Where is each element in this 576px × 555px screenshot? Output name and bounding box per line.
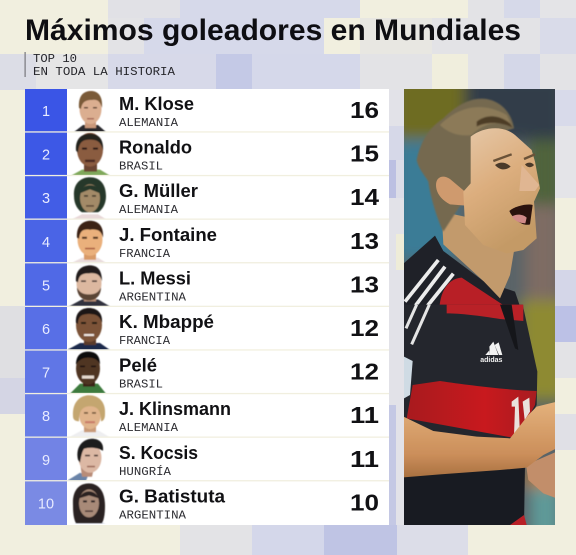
row 2: Ronaldo bbox=[25, 133, 389, 176]
nose bbox=[519, 165, 539, 191]
row 9: S. Kocsis bbox=[25, 438, 389, 481]
row 3: G. Müller: 3 bbox=[42, 191, 50, 207]
neck bbox=[442, 214, 514, 298]
row 2: Ronaldo: BRASIL bbox=[119, 160, 163, 174]
row 8: J. Klinsmann: 11 bbox=[350, 402, 379, 428]
row 1: M. Klose: 1 bbox=[42, 104, 50, 120]
row 6: K. Mbappé: FRANCIA bbox=[119, 334, 171, 348]
row 3: G. Müller: G. Müller bbox=[119, 180, 198, 201]
row 7: Pelé: BRASIL bbox=[119, 378, 163, 392]
row 9: S. Kocsis: 11 bbox=[350, 446, 379, 472]
portrait: Kocsis bbox=[67, 439, 103, 481]
row 5: L. Messi: L. Messi bbox=[119, 267, 191, 288]
row 7: Pelé: 12 bbox=[350, 359, 379, 385]
jersey collar and shoulder bbox=[400, 236, 521, 308]
red stomach band bbox=[407, 381, 537, 438]
portrait: Ronaldo bbox=[71, 133, 110, 176]
subtitle bbox=[24, 52, 176, 79]
subtitle: TOP 10 bbox=[33, 52, 77, 66]
row 1: M. Klose bbox=[25, 89, 389, 132]
red shoulder panel bbox=[440, 278, 502, 305]
row 5: L. Messi bbox=[25, 263, 389, 306]
row 9: S. Kocsis: HUNGRÍA bbox=[119, 464, 172, 479]
row 7: Pelé: Pelé bbox=[119, 355, 157, 376]
row 4: J. Fontaine: J. Fontaine bbox=[119, 224, 217, 245]
portrait: Pelé bbox=[70, 352, 106, 394]
row 5: L. Messi: ARGENTINA bbox=[119, 290, 187, 304]
adidas logo bbox=[480, 342, 503, 364]
row 10: G. Batistuta: ARGENTINA bbox=[119, 508, 187, 522]
row 6: K. Mbappé bbox=[25, 307, 389, 350]
shoulder stripes bbox=[405, 260, 453, 308]
open mouth bbox=[509, 204, 533, 225]
portrait: Mbappé bbox=[67, 308, 110, 350]
face bbox=[463, 128, 540, 253]
placket bbox=[500, 305, 518, 350]
shirt number 11 bbox=[512, 397, 530, 436]
row 6: K. Mbappé: K. Mbappé bbox=[119, 311, 214, 332]
title: Máximos goleadores en Mundiales bbox=[25, 14, 521, 47]
row 2: Ronaldo: 2 bbox=[42, 148, 50, 164]
ranking table bbox=[25, 89, 389, 525]
row 10: G. Batistuta: 10 bbox=[38, 496, 54, 512]
row 7: Pelé: 7 bbox=[42, 366, 50, 382]
row 7: Pelé bbox=[25, 351, 389, 394]
ear bbox=[436, 177, 466, 206]
row 2: Ronaldo: Ronaldo bbox=[119, 137, 192, 158]
photo background blur bbox=[404, 89, 555, 525]
row 10: G. Batistuta: 10 bbox=[350, 489, 379, 515]
row 10: G. Batistuta bbox=[25, 481, 389, 525]
portrait: Fontaine bbox=[72, 221, 106, 263]
lower shirt bbox=[404, 465, 525, 525]
row 8: J. Klinsmann: ALEMANIA bbox=[119, 421, 179, 435]
row 4: J. Fontaine: FRANCIA bbox=[119, 247, 171, 261]
row 6: K. Mbappé: 12 bbox=[350, 315, 379, 341]
row 9: S. Kocsis: 9 bbox=[42, 453, 50, 469]
portrait: Messi bbox=[69, 265, 110, 306]
row 5: L. Messi: 13 bbox=[350, 271, 379, 297]
row 3: G. Müller: ALEMANIA bbox=[119, 203, 179, 217]
portrait: Klose bbox=[74, 91, 106, 132]
row 1: M. Klose: M. Klose bbox=[119, 93, 194, 114]
row 4: J. Fontaine bbox=[25, 220, 389, 263]
row 2: Ronaldo: 15 bbox=[350, 141, 379, 167]
portrait: Klinsmann bbox=[69, 395, 110, 437]
adidas logo: adidas bbox=[480, 357, 503, 364]
row 3: G. Müller bbox=[25, 176, 389, 219]
row 4: J. Fontaine: 13 bbox=[350, 228, 379, 254]
sleeve stripes bbox=[406, 305, 429, 344]
hair bbox=[417, 99, 514, 232]
dark chest bbox=[400, 305, 537, 445]
row 4: J. Fontaine: 4 bbox=[42, 235, 50, 251]
row 8: J. Klinsmann bbox=[25, 394, 389, 437]
sleeve badge bbox=[404, 357, 413, 398]
lower hand bbox=[526, 452, 557, 498]
subtitle: EN TODA LA HISTORIA bbox=[33, 65, 176, 79]
forearm and hand bbox=[400, 402, 557, 478]
row 9: S. Kocsis: S. Kocsis bbox=[119, 442, 198, 463]
row 10: G. Batistuta: G. Batistuta bbox=[119, 485, 226, 506]
photo panel: Miroslav Klose celebrating bbox=[404, 89, 555, 525]
row 8: J. Klinsmann: J. Klinsmann bbox=[119, 398, 231, 419]
row 6: K. Mbappé: 6 bbox=[42, 322, 50, 338]
row 3: G. Müller: 14 bbox=[350, 184, 379, 210]
row 1: M. Klose: ALEMANIA bbox=[119, 116, 179, 130]
red shoulder band bbox=[447, 305, 523, 321]
eyes bbox=[495, 163, 511, 169]
row 8: J. Klinsmann: 8 bbox=[42, 409, 50, 425]
portrait: Müller bbox=[72, 177, 106, 219]
row 5: L. Messi: 5 bbox=[42, 278, 50, 294]
upper body and head bbox=[400, 99, 540, 308]
row 1: M. Klose: 16 bbox=[350, 97, 379, 123]
torso bbox=[400, 305, 557, 525]
portrait: Batistuta bbox=[73, 483, 106, 524]
